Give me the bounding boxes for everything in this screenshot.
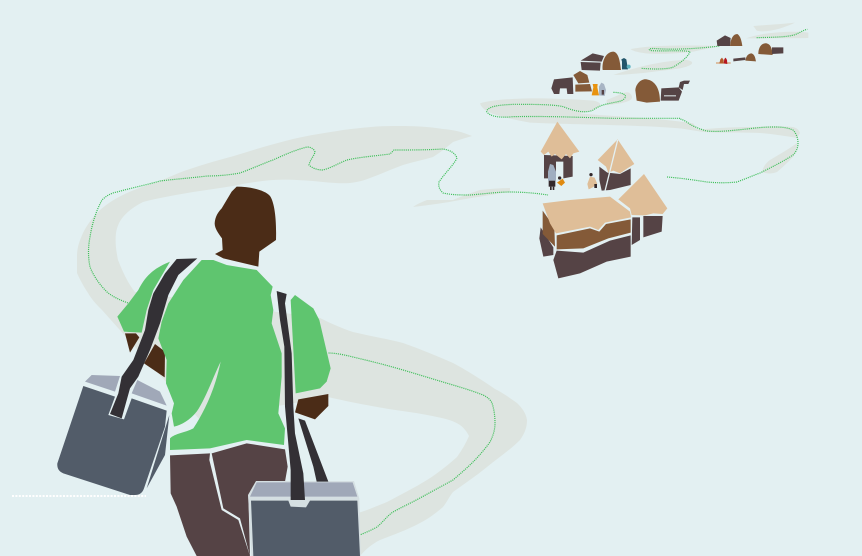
trousers: [170, 443, 288, 556]
large hut back: [618, 174, 667, 245]
right strap and handle: [277, 291, 328, 500]
distant village huts and people: [551, 34, 783, 103]
hut with doorway: [541, 122, 579, 178]
dotted green route, distant: [487, 29, 807, 118]
distant road segments: [480, 23, 808, 131]
hut: left cluster: [551, 71, 592, 94]
right cool box: [248, 481, 361, 556]
villagers: [548, 164, 597, 190]
winding road: [77, 121, 800, 556]
left strap: [110, 258, 197, 418]
hut right: [598, 139, 634, 191]
white dotted baseline: [12, 495, 146, 497]
dotted green route, foreground: [88, 119, 798, 537]
man carrying cool boxes: [57, 187, 361, 556]
hut with animal: [635, 79, 690, 103]
large foreground hut: [539, 197, 631, 278]
hut: far-left pair: [581, 52, 621, 71]
head: [215, 187, 276, 267]
shirt: [117, 260, 331, 450]
near village huts: [539, 122, 667, 278]
far-right huts: [717, 34, 783, 61]
left cool box: [57, 375, 169, 495]
arms: [125, 333, 328, 419]
people: [592, 58, 731, 96]
